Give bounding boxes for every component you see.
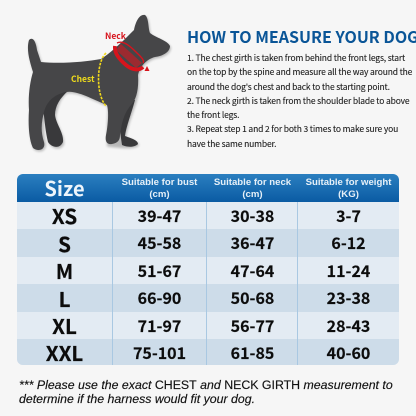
header: neck: (cm) [242, 188, 263, 200]
neck collar [115, 42, 150, 71]
instructions text: on the top by the spine and measure all the way around the [187, 66, 412, 78]
row XXL: XXL [46, 337, 83, 367]
row XS: 39-47 [138, 203, 181, 227]
dog far legs [40, 91, 138, 147]
row XS: 3-7 [336, 203, 361, 227]
header: neck [214, 177, 291, 200]
row XL: 28-43 [327, 313, 370, 337]
footnote: determine if the harness would fit your dog. [19, 392, 255, 406]
row XS: 30-38 [231, 203, 274, 227]
row XS: XS [52, 200, 77, 230]
header: bust [122, 177, 198, 200]
header: weight: Suitable for weight [306, 177, 391, 188]
dog shadow [29, 16, 171, 152]
header: bust: Suitable for bust [122, 177, 197, 188]
table body band [17, 202, 399, 365]
row M: 51-67 [138, 258, 181, 282]
header: neck: Suitable for neck [214, 177, 291, 188]
header: weight: (KG) [338, 188, 359, 200]
header: bust: (cm) [149, 188, 170, 200]
row XXL [46, 337, 370, 367]
row XXL: 75-101 [133, 340, 186, 364]
row M: 11-24 [327, 258, 370, 282]
row S: 45-58 [138, 230, 181, 254]
footnote: *** Please use the exact CHEST and NECK GIRTH measurement to [19, 378, 393, 392]
row M [56, 255, 370, 285]
instructions text: have the same number. [187, 138, 276, 150]
row S [58, 228, 366, 258]
chest measuring line [98, 53, 106, 106]
table header band [17, 174, 399, 202]
row L: 23-38 [327, 285, 370, 309]
row S: 6-12 [331, 230, 366, 254]
row XL: XL [52, 310, 77, 340]
header: weight [306, 177, 392, 200]
row L [59, 283, 370, 313]
row S: 36-47 [231, 230, 274, 254]
instructions text: the front legs. [187, 109, 239, 121]
footnote [19, 378, 393, 406]
row XS [52, 200, 361, 230]
row L: L [59, 283, 70, 313]
row M: M [56, 255, 73, 285]
row XL [52, 310, 370, 340]
instructions text: 3. Repeat step 1 and 2 for both 3 times to make sure you [187, 123, 398, 135]
row S: S [58, 228, 71, 258]
header: size: Size [44, 173, 85, 202]
dog body [28, 15, 170, 150]
chest label: Chest [71, 73, 95, 85]
instructions text: 1. The chest girth is taken from behind the front legs, start [187, 52, 405, 64]
row L: 66-90 [138, 285, 181, 309]
row L: 50-68 [231, 285, 274, 309]
row XL: 56-77 [231, 313, 274, 337]
row XL: 71-97 [138, 313, 181, 337]
neck label: Neck [105, 30, 127, 42]
instructions text: around the dog's chest and back to the starting point. [187, 81, 390, 93]
row XXL: 61-85 [231, 340, 274, 364]
instructions text: 2. The neck girth is taken from the shoulder blade to above [187, 95, 410, 107]
illustration: dog with measuring lines [28, 14, 172, 153]
row M: 47-64 [231, 258, 274, 282]
instructions text [187, 52, 412, 150]
row XXL: 40-60 [327, 340, 370, 364]
heading: HOW TO MEASURE YOUR DOG [187, 24, 416, 48]
